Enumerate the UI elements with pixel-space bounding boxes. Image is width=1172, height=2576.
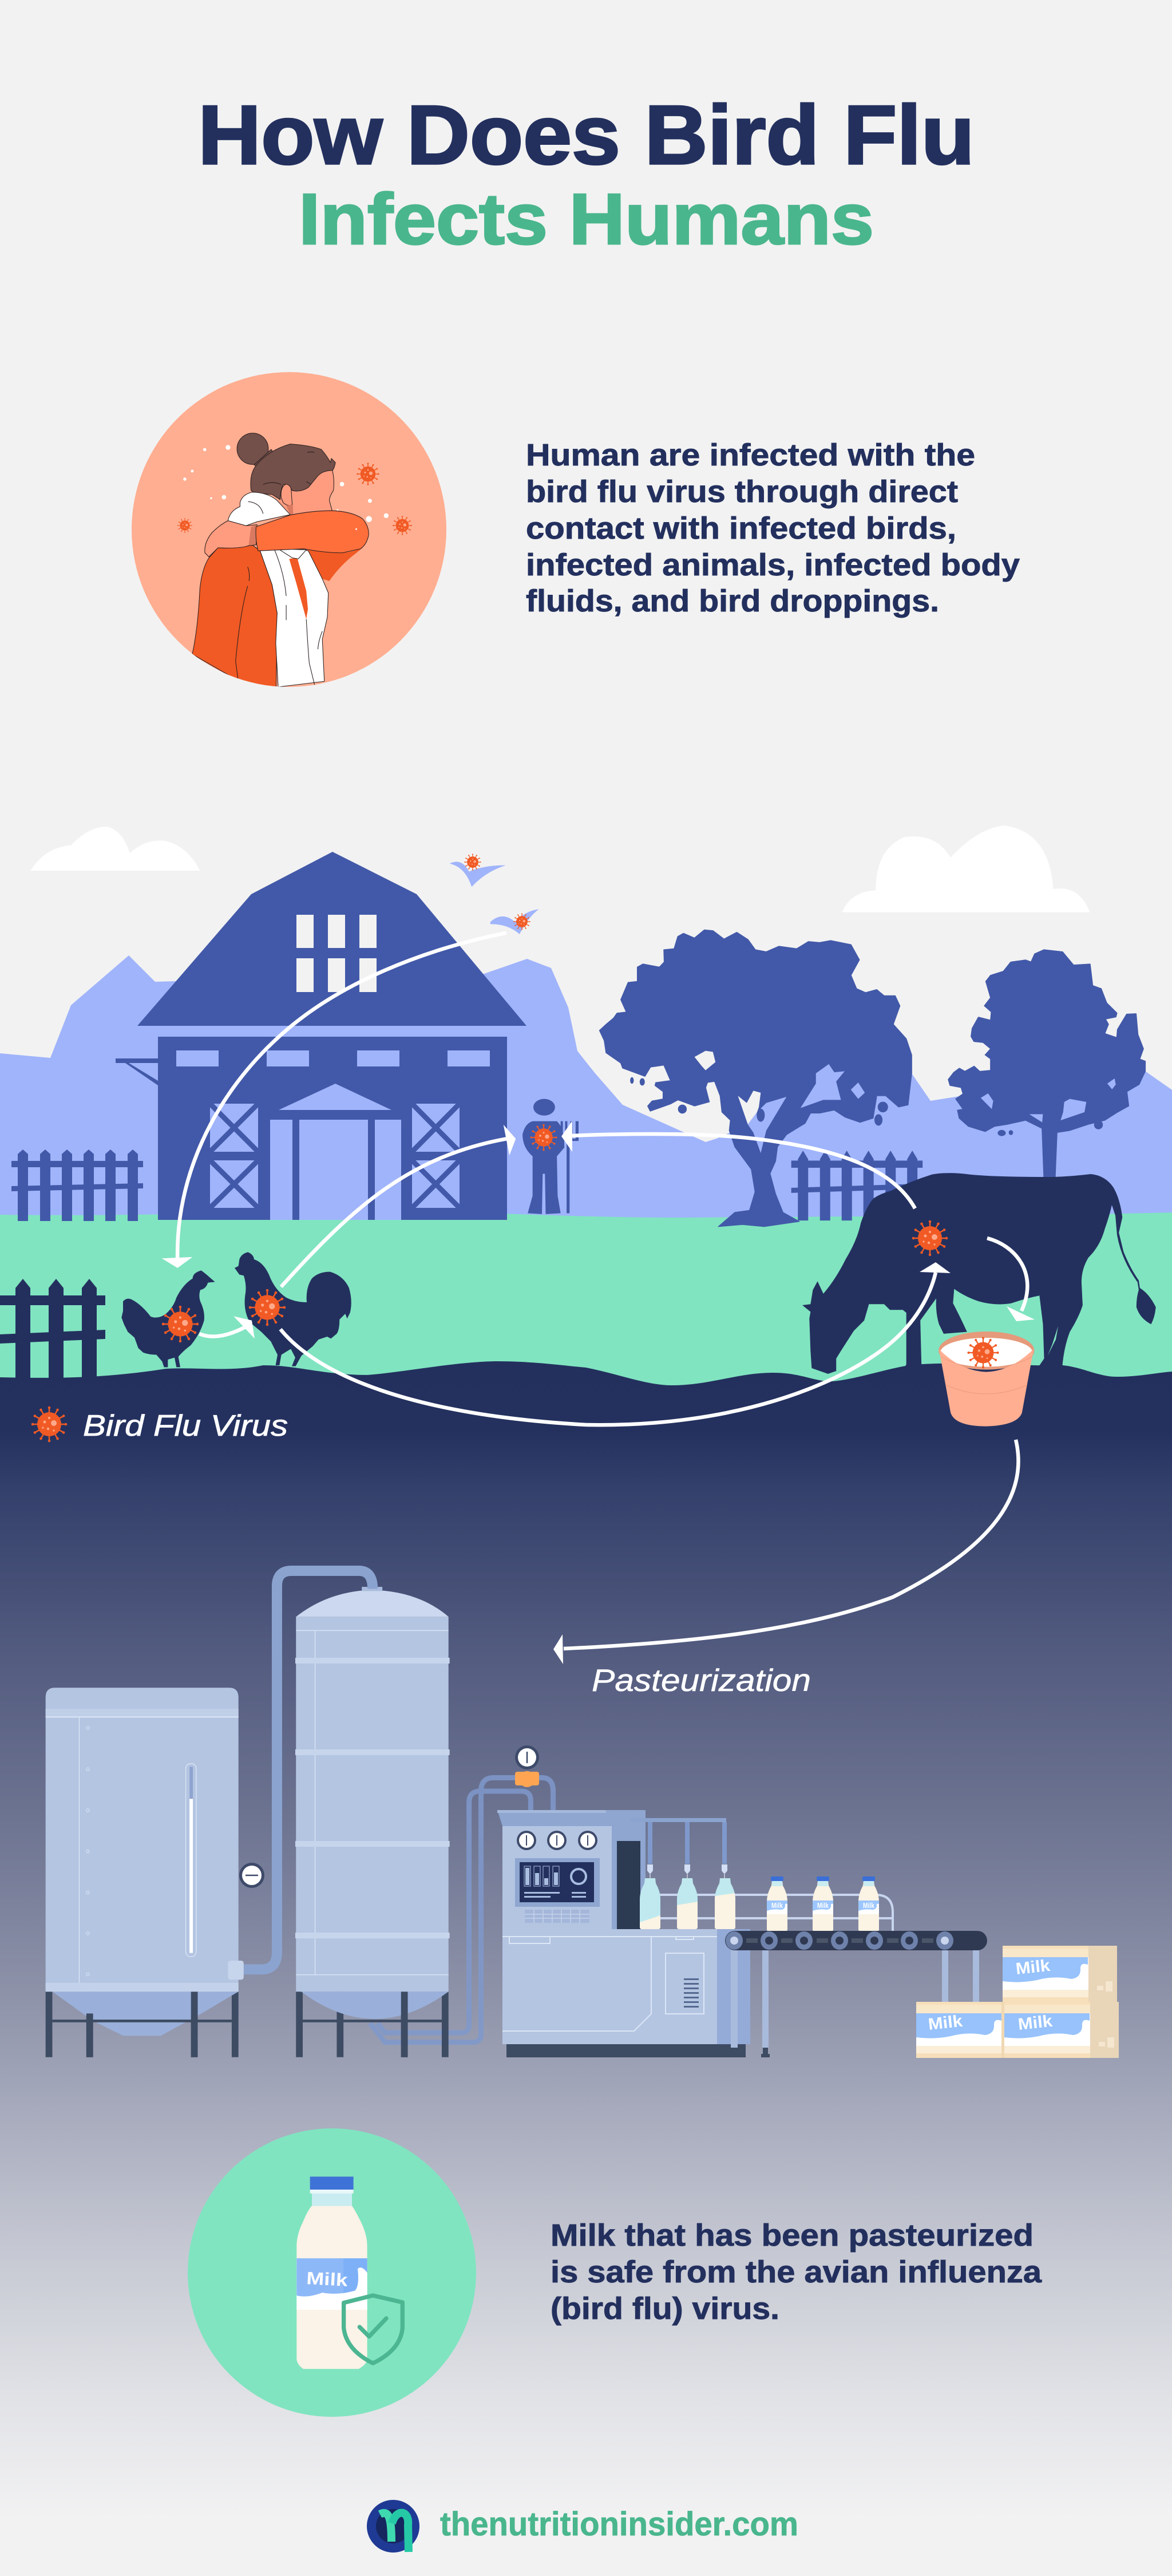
clouds [31,825,1090,912]
icon: person coughing into elbow [183,433,389,687]
text block: pasteurized milk is safe: is safe from the avian influenza [551,2255,1042,2289]
arrow: bucket to pasteurization [553,1440,1019,1664]
valve and gauge [515,1745,539,1787]
milk boxes: Milk [1017,2012,1054,2034]
rooster [235,1252,351,1366]
arrow: hen to rooster [199,1316,255,1338]
label: pasteurization: Pasteurization [592,1662,811,1698]
panel: tall silo [295,1587,450,2057]
title: Infects Humans [299,179,874,259]
barn [116,852,526,1220]
front fence [0,1279,105,1380]
icon: virus particles [178,464,411,535]
legend: bird flu virus: Bird Flu Virus [83,1409,288,1443]
conveyor belt [725,1931,987,2057]
arrow: rooster to cow [280,1262,951,1425]
text block: how humans are infected: contact with infected birds, [526,511,956,546]
arrow: cow to farmer [561,1121,915,1208]
panel: pasteurizer machine [497,1810,750,2057]
machine gauges [517,1831,597,1850]
ground [0,1361,1172,2576]
bucket [939,1332,1034,1427]
legend: bird flu virus [33,1408,288,1443]
milk boxes: Milk [1015,1957,1051,1978]
grass [0,1211,1172,1402]
text block: pasteurized milk is safe: (bird flu) virus. [551,2291,779,2326]
panel: person coughing [132,372,446,687]
title: How Does Bird Flu [198,88,975,181]
icon: shield check [344,2296,402,2363]
conveyor rail [658,1895,893,1931]
gauge: tank pressure [239,1863,264,1888]
right tree [948,950,1145,1178]
capped milk bottles: Milk [863,1901,875,1910]
cow [802,1173,1156,1376]
milk boxes: Milk [927,2012,964,2034]
right tree gaps [981,1078,1116,1123]
capped milk bottles: Milk [817,1901,829,1910]
text block: how humans are infected [526,438,1020,618]
title [198,88,975,259]
text block: how humans are infected: fluids, and bird droppings. [526,584,939,618]
control screen [515,1858,600,1907]
viruses in the scene [163,1125,998,1368]
panel: safe milk [188,2128,476,2417]
text block: how humans are infected: infected animals, infected body [526,548,1020,582]
text block: how humans are infected: bird flu virus through direct [526,475,958,509]
hen [121,1270,215,1367]
text block: how humans are infected: Human are infected with the [526,438,975,472]
big tree [600,930,912,1227]
text block: pasteurized milk is safe: Milk that has been pasteurized [551,2218,1034,2253]
mountains [0,955,1172,1259]
icon: milk bottle: Milk [306,2268,349,2290]
farmer [522,1099,579,1214]
milk boxes [916,1946,1119,2058]
text block: pasteurized milk is safe [551,2218,1042,2326]
thin pipes [370,1778,553,2042]
birds with virus [450,854,539,934]
capped milk bottles: Milk [771,1901,783,1910]
bottles being filled [640,1878,735,1930]
arrow: rooster to farmer [281,1125,516,1287]
logo [367,2500,419,2553]
back fence left [11,1149,143,1221]
arrow: bird to hen [162,933,506,1268]
panel: storage tank [46,1688,239,2057]
connecting pipe [228,1571,373,1980]
keypad [525,1910,589,1923]
big tree gaps [695,1051,865,1153]
footer url: thenutritioninsider.com [440,2506,798,2543]
icon: milk bottle [296,2176,367,2369]
back fence right [791,1151,922,1220]
arrow: cow to bucket [987,1238,1035,1321]
filling nozzles [631,1818,727,1879]
capped milk bottles [767,1876,879,1931]
